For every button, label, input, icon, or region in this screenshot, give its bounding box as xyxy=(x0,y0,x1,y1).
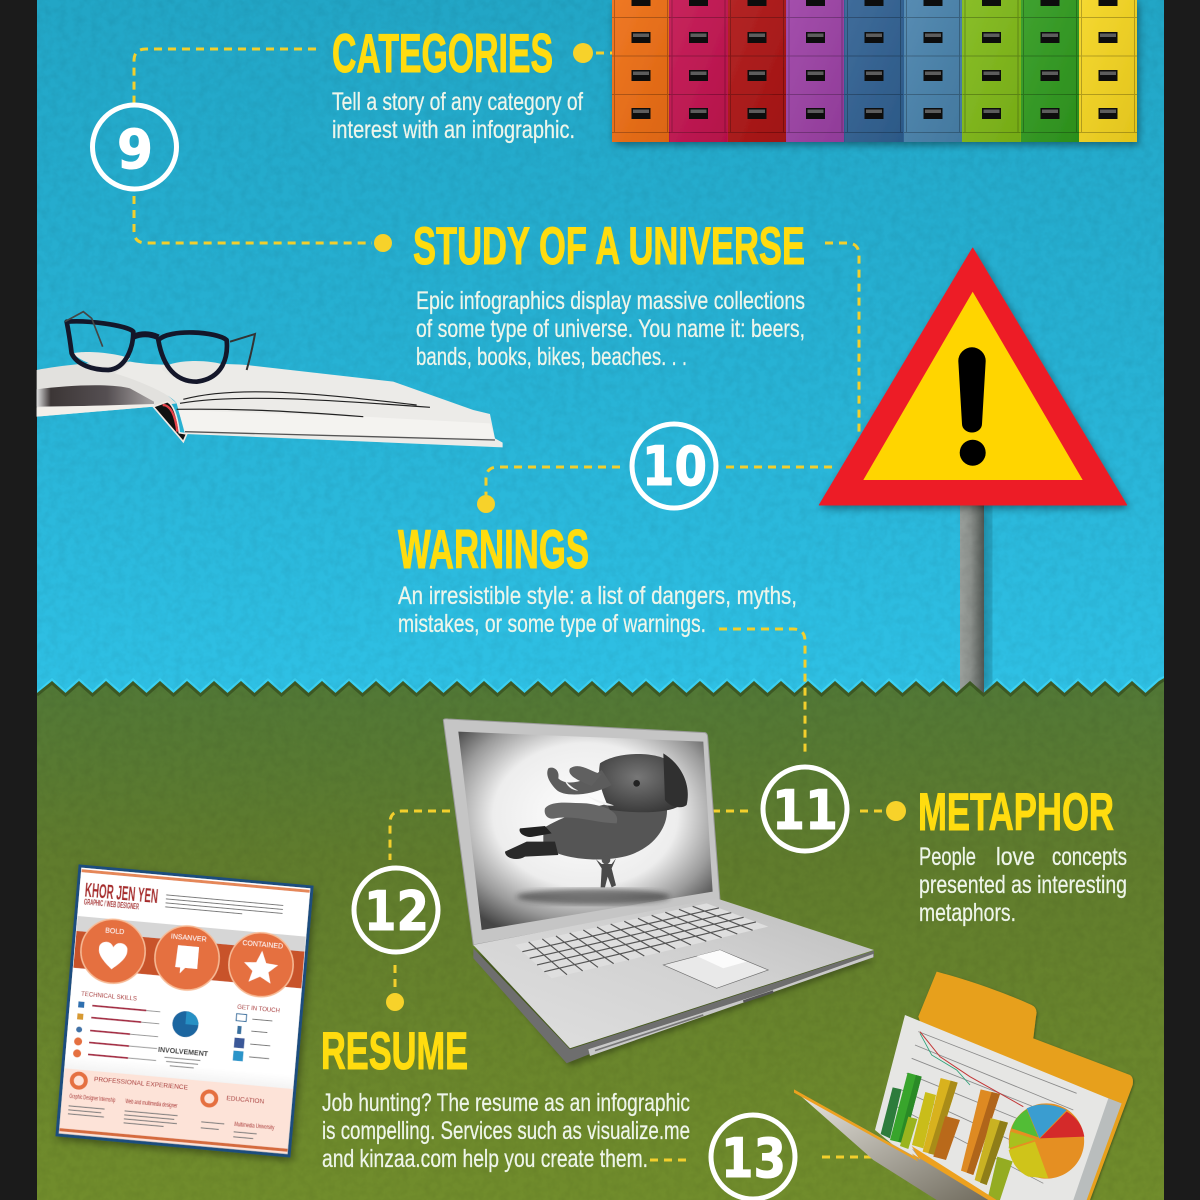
text: metaphor body: People xyxy=(919,843,976,871)
book underside xyxy=(37,385,154,407)
involvement pie chart: INVOLVEMENT xyxy=(158,1047,209,1058)
laptop front edge xyxy=(473,948,874,1063)
pie chart xyxy=(1009,1103,1084,1179)
number badge 11: 11 xyxy=(772,779,838,842)
text: categories body xyxy=(332,88,583,144)
panel: blue section xyxy=(37,0,1164,700)
resume name xyxy=(84,880,159,913)
glasses lens reflections xyxy=(73,352,225,379)
page edges xyxy=(177,392,430,417)
connector: resume to 13 to folder xyxy=(650,1157,872,1160)
badge: bold xyxy=(78,917,148,986)
resume band xyxy=(73,931,304,988)
connector: warnings to 11 xyxy=(719,629,805,756)
badge: star xyxy=(226,930,296,999)
connector: categories dot xyxy=(573,43,612,63)
text: resume body: is compelling. Services such as visualize.me xyxy=(322,1117,690,1145)
page block xyxy=(178,410,495,438)
heading: study of a universe: STUDY OF A UNIVERSE xyxy=(413,217,805,276)
illustration: infographic resume xyxy=(57,866,312,1156)
number badge 13: 13 xyxy=(721,1127,786,1190)
icon: filing cabinets xyxy=(612,0,1137,142)
laptop screen xyxy=(458,732,713,930)
book left page xyxy=(37,362,177,417)
technical skills xyxy=(73,991,161,1065)
badge: speech: INSANVER xyxy=(171,933,207,944)
zigzag highlight xyxy=(37,676,1164,700)
book white lower cover xyxy=(37,404,154,417)
bars xyxy=(881,1073,1013,1200)
text: universe body: of some type of universe. You name it: beers, xyxy=(416,315,805,343)
trackpad xyxy=(663,950,768,988)
zigzag shadow xyxy=(37,680,1164,695)
folder front flap xyxy=(794,1090,997,1200)
number badge 13 xyxy=(711,1115,795,1199)
text: categories body: interest with an infographic. xyxy=(332,116,575,144)
connector: 10 to sign and warnings xyxy=(477,467,838,513)
text: universe body xyxy=(416,287,805,371)
badge: bold: BOLD xyxy=(105,928,124,936)
illustration: infographic resume: KHOR JEN YEN xyxy=(84,880,159,908)
experience panel: PROFESSIONAL EXPERIENCE xyxy=(94,1076,189,1092)
panel: green section xyxy=(37,678,1164,1200)
illustration: open book with glasses xyxy=(37,312,503,447)
paper stack xyxy=(913,1023,1122,1200)
connector: universe to warning sign xyxy=(825,243,859,434)
icon: warning triangle xyxy=(819,248,1127,505)
resume intro lines xyxy=(165,895,283,917)
text: metaphor body: metaphors. xyxy=(919,899,1016,927)
number badge 10: 10 xyxy=(642,435,707,498)
resume grey shading above band xyxy=(76,916,306,953)
badge: star: CONTAINED xyxy=(242,940,283,951)
text: warnings body: mistakes, or some type of warnings. xyxy=(398,610,706,638)
folder back xyxy=(918,972,1133,1200)
text: metaphor body: presented as interesting xyxy=(919,871,1127,899)
keyboard xyxy=(515,903,768,978)
illustration: laptop with elephant xyxy=(443,719,877,1067)
connector: laptop to 12 to resume xyxy=(386,811,450,1011)
contact list: GET IN TOUCH xyxy=(237,1005,280,1015)
text: resume body: Job hunting? The resume as an infographic xyxy=(322,1089,690,1117)
number badge 9: 9 xyxy=(117,118,153,181)
text: categories body: Tell a story of any category of xyxy=(332,88,583,116)
heading: warnings: WARNINGS xyxy=(398,518,589,580)
experience panel: Multimedia University xyxy=(234,1122,275,1131)
heading: resume: RESUME xyxy=(321,1022,468,1081)
elephant on man xyxy=(505,753,688,887)
elephant floor shadow xyxy=(517,889,670,905)
number badge 10 xyxy=(632,424,716,508)
chart page xyxy=(875,1015,1108,1200)
text: warnings body xyxy=(398,582,797,638)
number badge 12: 12 xyxy=(364,880,429,943)
text: warnings body: An irresistible style: a list of dangers, myths, xyxy=(398,582,797,610)
experience panel: Web and multimedia designer xyxy=(125,1099,178,1110)
connector: 11 to metaphor xyxy=(712,801,906,821)
experience panel: EDUCATION xyxy=(226,1095,265,1105)
connector: 9 to categories and universe xyxy=(134,49,392,252)
laptop shadow xyxy=(473,953,877,1067)
text: resume body: and kinzaa.com help you create them. xyxy=(322,1145,648,1173)
illustration: folder with charts xyxy=(794,972,1133,1200)
book right page xyxy=(115,362,503,447)
number badge 9 xyxy=(92,105,176,189)
text: metaphor body: love xyxy=(996,843,1035,871)
resume column separators xyxy=(67,968,301,1068)
involvement pie chart xyxy=(157,1009,212,1069)
book spine xyxy=(153,402,187,442)
badge: speech xyxy=(152,923,222,993)
text: universe body: bands, books, bikes, beaches. . . xyxy=(416,343,687,371)
experience panel xyxy=(59,1068,293,1154)
resume top stripe xyxy=(81,869,310,893)
glasses xyxy=(67,321,227,382)
resume name: GRAPHIC / WEB DESIGNER xyxy=(84,898,139,911)
heading: categories: CATEGORIES xyxy=(332,22,553,84)
text: resume body xyxy=(322,1089,690,1173)
text: metaphor body xyxy=(919,843,1127,927)
number badge 12 xyxy=(354,868,438,952)
contact list xyxy=(233,1005,280,1064)
sign post xyxy=(960,505,990,697)
technical skills: TECHNICAL SKILLS xyxy=(81,992,137,1003)
text: universe body: Epic infographics display massive collections xyxy=(416,287,805,315)
line chart grid xyxy=(897,1032,1077,1183)
laptop lid xyxy=(443,719,720,945)
number badge 11 xyxy=(763,767,847,851)
laptop base xyxy=(473,898,874,1048)
text: metaphor body: concepts xyxy=(1052,843,1127,871)
experience panel: Graphic Designer Internship xyxy=(69,1094,116,1104)
